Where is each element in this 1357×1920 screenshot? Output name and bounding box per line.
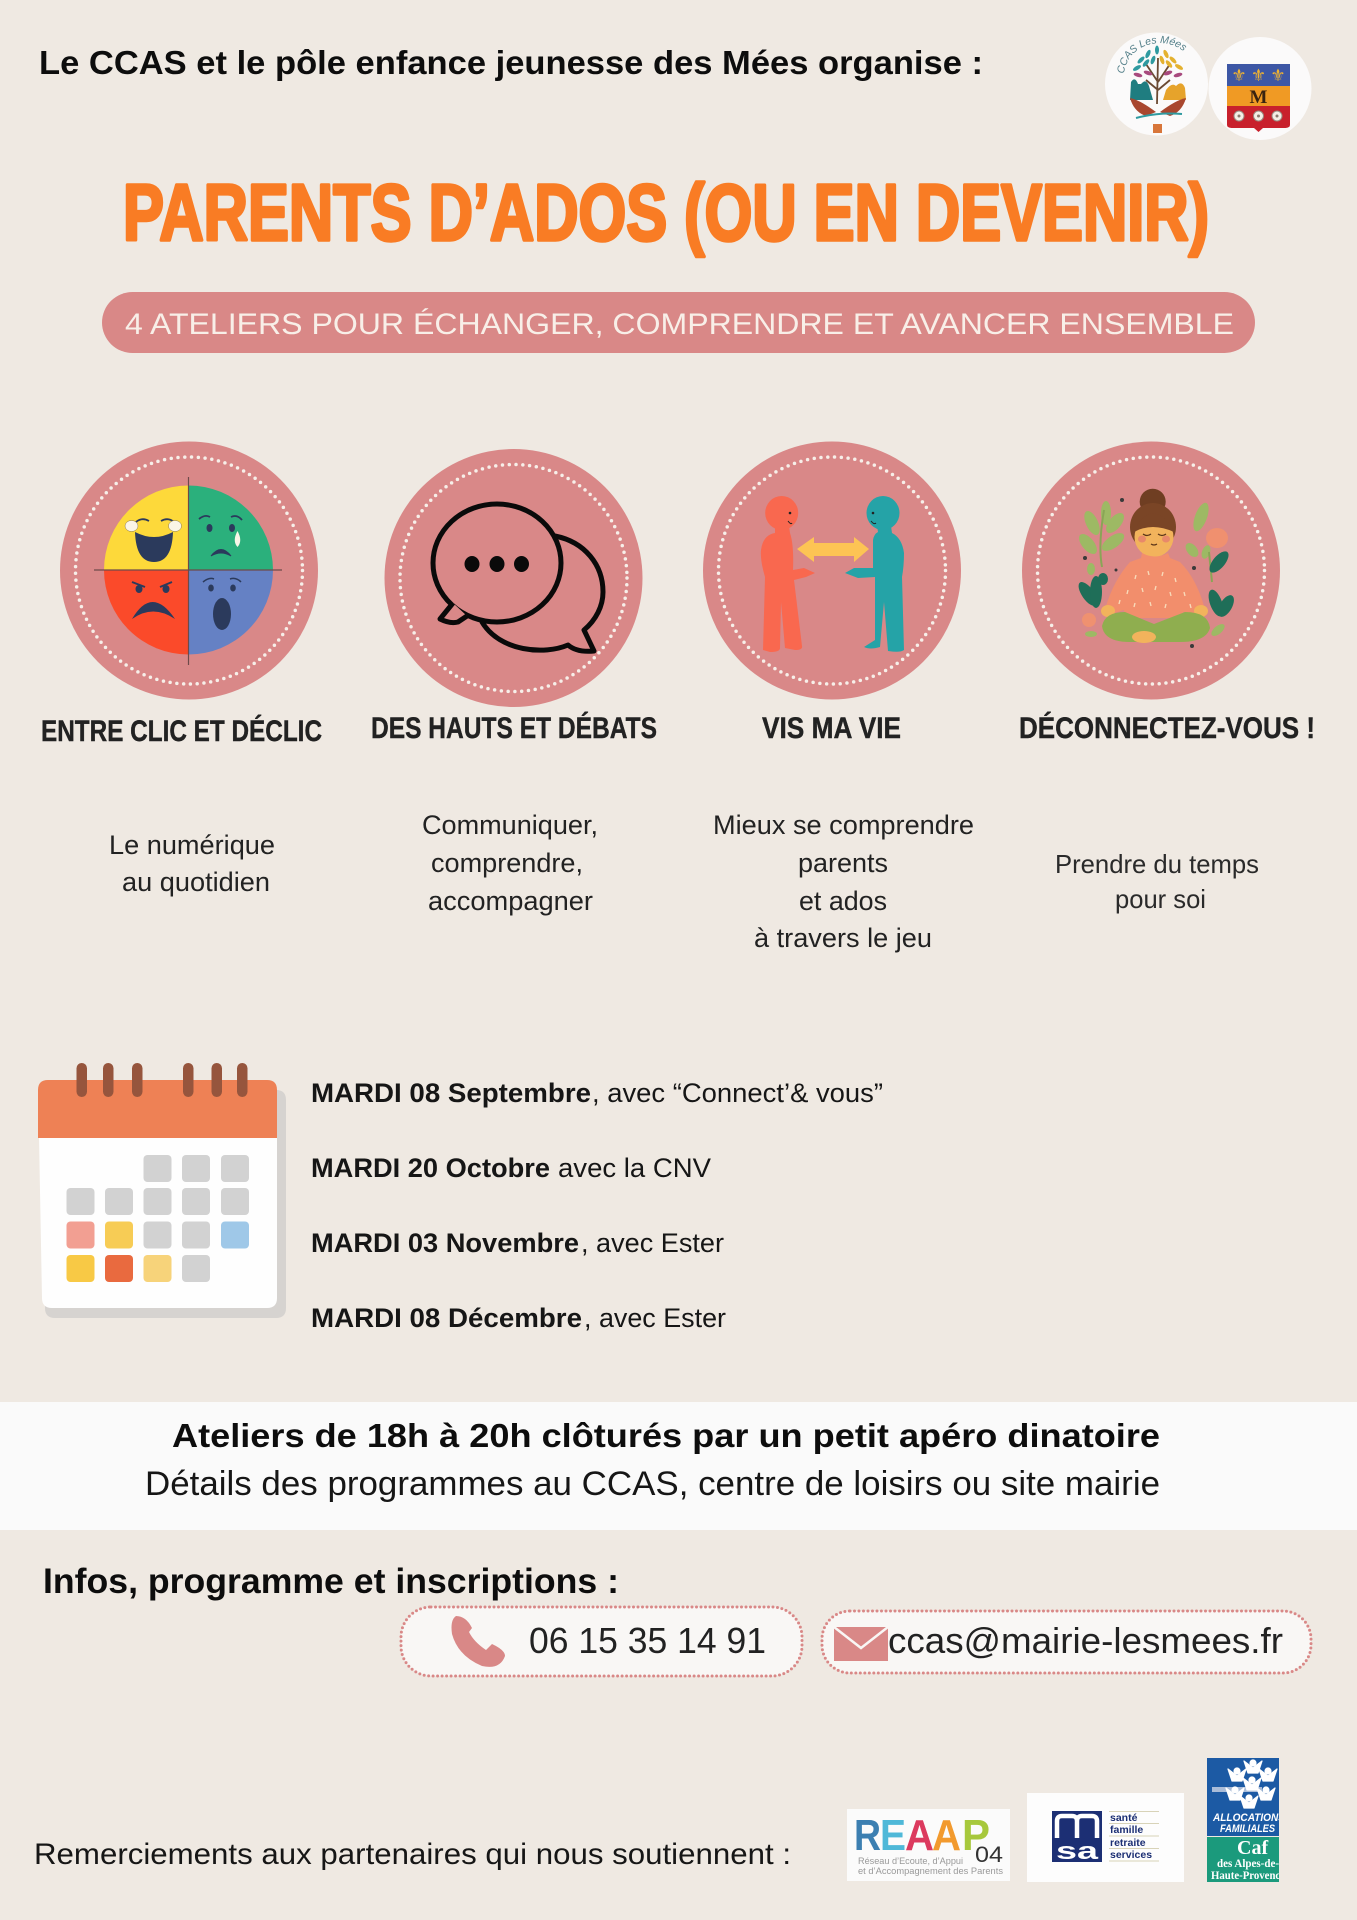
logo: REAAP: P <box>962 1811 990 1860</box>
logo: coat of arms: ⚜ <box>1231 66 1247 86</box>
logo: coat of arms: ⚜ <box>1251 66 1266 86</box>
email pill: ccas@mairie-lesmees.fr <box>888 1620 1283 1661</box>
date 3 <box>311 1228 724 1258</box>
info band: Détails des programmes au CCAS, centre de loisirs ou site mairie <box>145 1465 1160 1503</box>
icon: two people exchanging <box>703 442 961 700</box>
description <box>422 810 598 916</box>
logo: CAF: FAMILIALES <box>1220 1823 1276 1835</box>
logo: REAAP: A <box>905 1811 934 1860</box>
logo: CCAS Les Mées <box>1105 32 1208 136</box>
description: accompagner <box>428 886 593 916</box>
info band <box>0 1402 1357 1530</box>
logo: CAF: Haute-Provence <box>1211 1870 1285 1882</box>
logo: REAAP: et d’Accompagnement des Parents <box>858 1866 1003 1877</box>
subtitle pill <box>102 292 1255 353</box>
description: pour soi <box>1115 886 1206 914</box>
description <box>1055 851 1259 914</box>
description: Communiquer, <box>422 810 598 840</box>
icon: envelope <box>834 1627 888 1661</box>
partners text: Remerciements aux partenaires qui nous soutiennent : <box>34 1838 791 1871</box>
logo: CAF: des Alpes-de- <box>1217 1858 1279 1870</box>
date 1: , avec “Connect’& vous” <box>592 1078 883 1108</box>
panel: Déconnectez-vous <box>1019 442 1315 914</box>
description: Le numérique <box>109 830 275 860</box>
panel: Vis ma vie <box>703 442 974 953</box>
phone pill: 06 15 35 14 91 <box>529 1620 766 1661</box>
panel: Des hauts et débats <box>371 449 657 916</box>
date 4 <box>311 1303 726 1333</box>
logo: coat of arms: ⚜ <box>1270 66 1286 86</box>
logo: coat of arms <box>1208 37 1312 140</box>
logo: MSA: santé <box>1110 1812 1138 1824</box>
logo: MSA: retraite <box>1110 1837 1146 1849</box>
logo: MSA: famille <box>1110 1824 1143 1836</box>
date 4: MARDI 08 Décembre <box>311 1303 582 1333</box>
heading: DES HAUTS ET DÉBATS <box>371 711 657 745</box>
logo: CAF <box>1207 1758 1286 1882</box>
description <box>109 830 275 897</box>
logo: MSA <box>1027 1793 1184 1882</box>
icon: calendar <box>38 1063 286 1318</box>
intro heading: Le CCAS et le pôle enfance jeunesse des Mées organise : <box>39 44 983 81</box>
logo: REAAP: 04 <box>975 1842 1003 1867</box>
contact heading: Infos, programme et inscriptions : <box>43 1562 619 1601</box>
logo: REAAP <box>847 1809 1010 1881</box>
description: Mieux se comprendre <box>713 810 974 840</box>
description: parents <box>798 848 888 878</box>
logo: CCAS Les Mées: CCAS Les Mées <box>1117 36 1186 73</box>
subtitle pill: 4 ATELIERS POUR ÉCHANGER, COMPRENDRE ET AVANCER ENSEMBLE <box>125 308 1234 341</box>
info band: Ateliers de 18h à 20h clôturés par un petit apéro dinatoire <box>172 1417 1160 1454</box>
heading: VIS MA VIE <box>762 712 901 745</box>
description: au quotidien <box>122 867 270 897</box>
description: Prendre du temps <box>1055 851 1259 879</box>
date 1 <box>311 1078 883 1108</box>
phone pill <box>401 1607 802 1676</box>
icon: phone <box>452 1616 505 1667</box>
logo: REAAP: E <box>880 1811 906 1860</box>
panel: Entre clic et déclic <box>41 442 322 897</box>
logo: MSA: sa <box>1056 1838 1099 1865</box>
logo: MSA: services <box>1110 1849 1152 1861</box>
logo: coat of arms: M <box>1250 87 1268 108</box>
description: à travers le jeu <box>754 923 932 953</box>
date 2 <box>311 1153 711 1183</box>
date 3: MARDI 03 Novembre <box>311 1228 579 1258</box>
date 1: MARDI 08 Septembre <box>311 1078 591 1108</box>
list of dates <box>311 1078 883 1333</box>
logo: REAAP: A <box>932 1811 961 1860</box>
description <box>713 810 974 953</box>
logo: REAAP: Réseau d’Ecoute, d’Appui <box>858 1856 963 1867</box>
email pill <box>822 1611 1311 1673</box>
description: et ados <box>799 886 887 916</box>
date 2: MARDI 20 Octobre <box>311 1153 550 1183</box>
heading: DÉCONNECTEZ-VOUS ! <box>1019 711 1315 745</box>
date 2: avec la CNV <box>558 1153 711 1183</box>
logo: REAAP: R <box>854 1811 881 1860</box>
heading: ENTRE CLIC ET DÉCLIC <box>41 714 322 748</box>
description: comprendre, <box>431 848 583 878</box>
icon: speech bubbles <box>384 449 642 707</box>
date 4: , avec Ester <box>584 1303 726 1333</box>
icon: four emotions disc <box>60 442 318 700</box>
logo: CAF: Caf <box>1237 1837 1268 1859</box>
date 3: , avec Ester <box>581 1228 724 1258</box>
logo: CAF: ALLOCATIONS <box>1212 1812 1286 1824</box>
icon: meditating woman <box>1022 442 1280 700</box>
